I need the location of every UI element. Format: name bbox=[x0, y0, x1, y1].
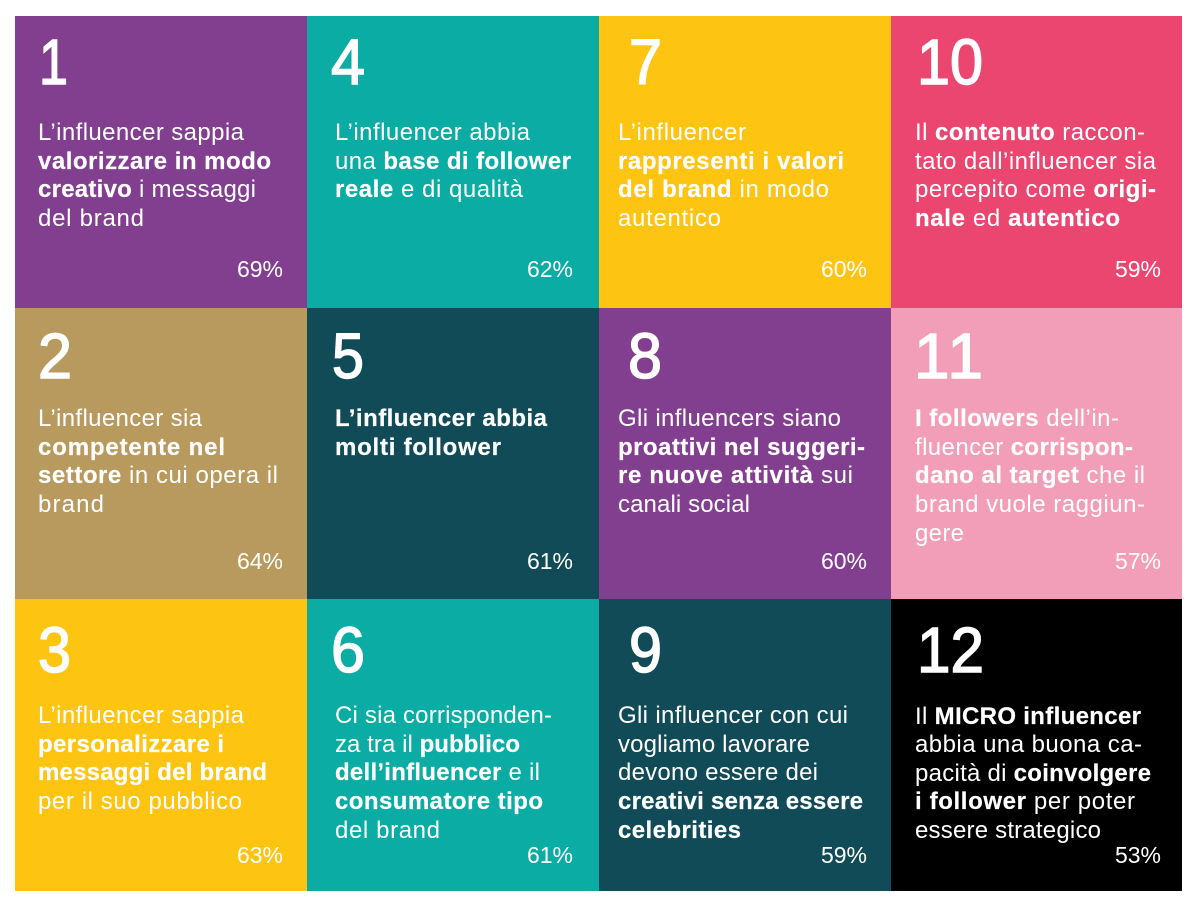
text block 11: gere bbox=[915, 520, 964, 547]
text block 5: molti follower bbox=[335, 434, 501, 461]
text block 7: autentico bbox=[618, 205, 721, 232]
panel: 2 bbox=[15, 308, 307, 599]
text block 10: Il contenuto raccon- bbox=[915, 119, 1145, 146]
number 6: 6 bbox=[331, 614, 365, 686]
percentage 61%: 61% bbox=[527, 842, 573, 868]
text block 7 bbox=[618, 119, 844, 232]
text block 2: brand bbox=[38, 491, 104, 518]
number 5: 5 bbox=[332, 320, 364, 392]
text block 12: i follower per poter bbox=[915, 788, 1135, 815]
text block 7: L’influencer bbox=[618, 119, 746, 146]
panel: 1 bbox=[15, 16, 307, 308]
text block 2: settore in cui opera il bbox=[38, 462, 278, 489]
percentage 63%: 63% bbox=[237, 842, 283, 868]
text block 10: percepito come origi- bbox=[915, 176, 1156, 203]
panel: 10 bbox=[891, 16, 1182, 308]
text block 1: creativo i messaggi bbox=[38, 176, 256, 203]
number 3: 3 bbox=[38, 614, 71, 686]
text block 3: personalizzare i bbox=[38, 731, 224, 758]
text block 4 bbox=[335, 119, 571, 203]
percentage 59%: 59% bbox=[1115, 256, 1161, 282]
text block 11: brand vuole raggiun- bbox=[915, 491, 1145, 518]
text block 9: devono essere dei bbox=[618, 759, 818, 786]
text block 12: abbia una buona ca- bbox=[915, 731, 1142, 758]
text block 6 bbox=[335, 702, 552, 844]
percentage 60%: 60% bbox=[821, 548, 867, 574]
text block 2: competente nel bbox=[38, 434, 225, 461]
text block 11: fluencer corrispon- bbox=[915, 434, 1133, 461]
percentage 64%: 64% bbox=[237, 548, 283, 574]
text block 5 bbox=[335, 405, 548, 461]
percentage 62%: 62% bbox=[527, 256, 573, 282]
panel: 11 bbox=[891, 308, 1182, 599]
number 2: 2 bbox=[38, 320, 72, 392]
text block 9 bbox=[618, 702, 863, 844]
percentage 57%: 57% bbox=[1115, 548, 1161, 574]
panel: 12 bbox=[891, 599, 1182, 891]
text block 3: L’influencer sappia bbox=[38, 702, 245, 729]
percentage 59%: 59% bbox=[821, 842, 867, 868]
panel: 6 bbox=[307, 599, 599, 891]
text block 9: Gli influencer con cui bbox=[618, 702, 848, 729]
panel: 7 bbox=[599, 16, 891, 308]
text block 2 bbox=[38, 405, 278, 518]
text block 1: L’influencer sappia bbox=[38, 119, 245, 146]
text block 8: Gli influencers siano bbox=[618, 405, 841, 432]
text block 11: dano al target che il bbox=[915, 462, 1145, 489]
text block 8: re nuove attività sui bbox=[618, 462, 853, 489]
text block 4: una base di follower bbox=[335, 148, 571, 175]
text block 3: per il suo pubblico bbox=[38, 788, 242, 815]
text block 6: za tra il pubblico bbox=[335, 731, 520, 758]
text block 12: Il MICRO influencer bbox=[915, 703, 1141, 730]
text block 4: reale e di qualità bbox=[335, 176, 524, 203]
percentage 61%: 61% bbox=[527, 548, 573, 574]
text block 9: creativi senza essere bbox=[618, 788, 863, 815]
panel: 4 bbox=[307, 16, 599, 308]
text block 12 bbox=[915, 703, 1151, 844]
number 9: 9 bbox=[629, 614, 662, 686]
text block 12: pacità di coinvolgere bbox=[915, 760, 1151, 787]
number 1: 1 bbox=[39, 26, 68, 98]
number 12: 12 bbox=[917, 614, 984, 686]
number 4: 4 bbox=[331, 26, 365, 98]
text block 7: rappresenti i valori bbox=[618, 148, 844, 175]
panel: 3 bbox=[15, 599, 307, 891]
text block 8: proattivi nel suggeri- bbox=[618, 434, 865, 461]
text block 2: L’influencer sia bbox=[38, 405, 203, 432]
text block 10: nale ed autentico bbox=[915, 205, 1120, 232]
text block 9: celebrities bbox=[618, 817, 741, 844]
text block 6: consumatore tipo bbox=[335, 788, 543, 815]
text block 3 bbox=[38, 702, 267, 815]
percentage 60%: 60% bbox=[821, 256, 867, 282]
text block 6: Ci sia corrisponden- bbox=[335, 702, 552, 729]
panel: 5 bbox=[307, 308, 599, 599]
text block 6: del brand bbox=[335, 817, 440, 844]
number 11: 11 bbox=[914, 320, 983, 392]
percentage 69%: 69% bbox=[237, 256, 283, 282]
text block 7: del brand in modo bbox=[618, 176, 829, 203]
text block 11: I followers dell’in- bbox=[915, 405, 1119, 432]
text block 5: L’influencer abbia bbox=[335, 405, 548, 432]
panel: 8 bbox=[599, 308, 891, 599]
text block 4: L’influencer abbia bbox=[335, 119, 531, 146]
text block 11 bbox=[915, 405, 1145, 547]
text block 6: dell’influencer e il bbox=[335, 759, 540, 786]
text block 1 bbox=[38, 119, 271, 232]
number 10: 10 bbox=[917, 26, 983, 98]
text block 8: canali social bbox=[618, 491, 750, 518]
number 8: 8 bbox=[628, 320, 662, 392]
text block 10: tato dall’influencer sia bbox=[915, 148, 1157, 175]
text block 10 bbox=[915, 119, 1157, 232]
panel: 9 bbox=[599, 599, 891, 891]
percentage 53%: 53% bbox=[1115, 842, 1161, 868]
text block 1: del brand bbox=[38, 205, 144, 232]
text block 9: vogliamo lavorare bbox=[618, 731, 810, 758]
text block 1: valorizzare in modo bbox=[38, 148, 271, 175]
text block 12: essere strategico bbox=[915, 817, 1101, 844]
text block 3: messaggi del brand bbox=[38, 759, 267, 786]
number 7: 7 bbox=[629, 26, 662, 98]
text block 8 bbox=[618, 405, 865, 518]
